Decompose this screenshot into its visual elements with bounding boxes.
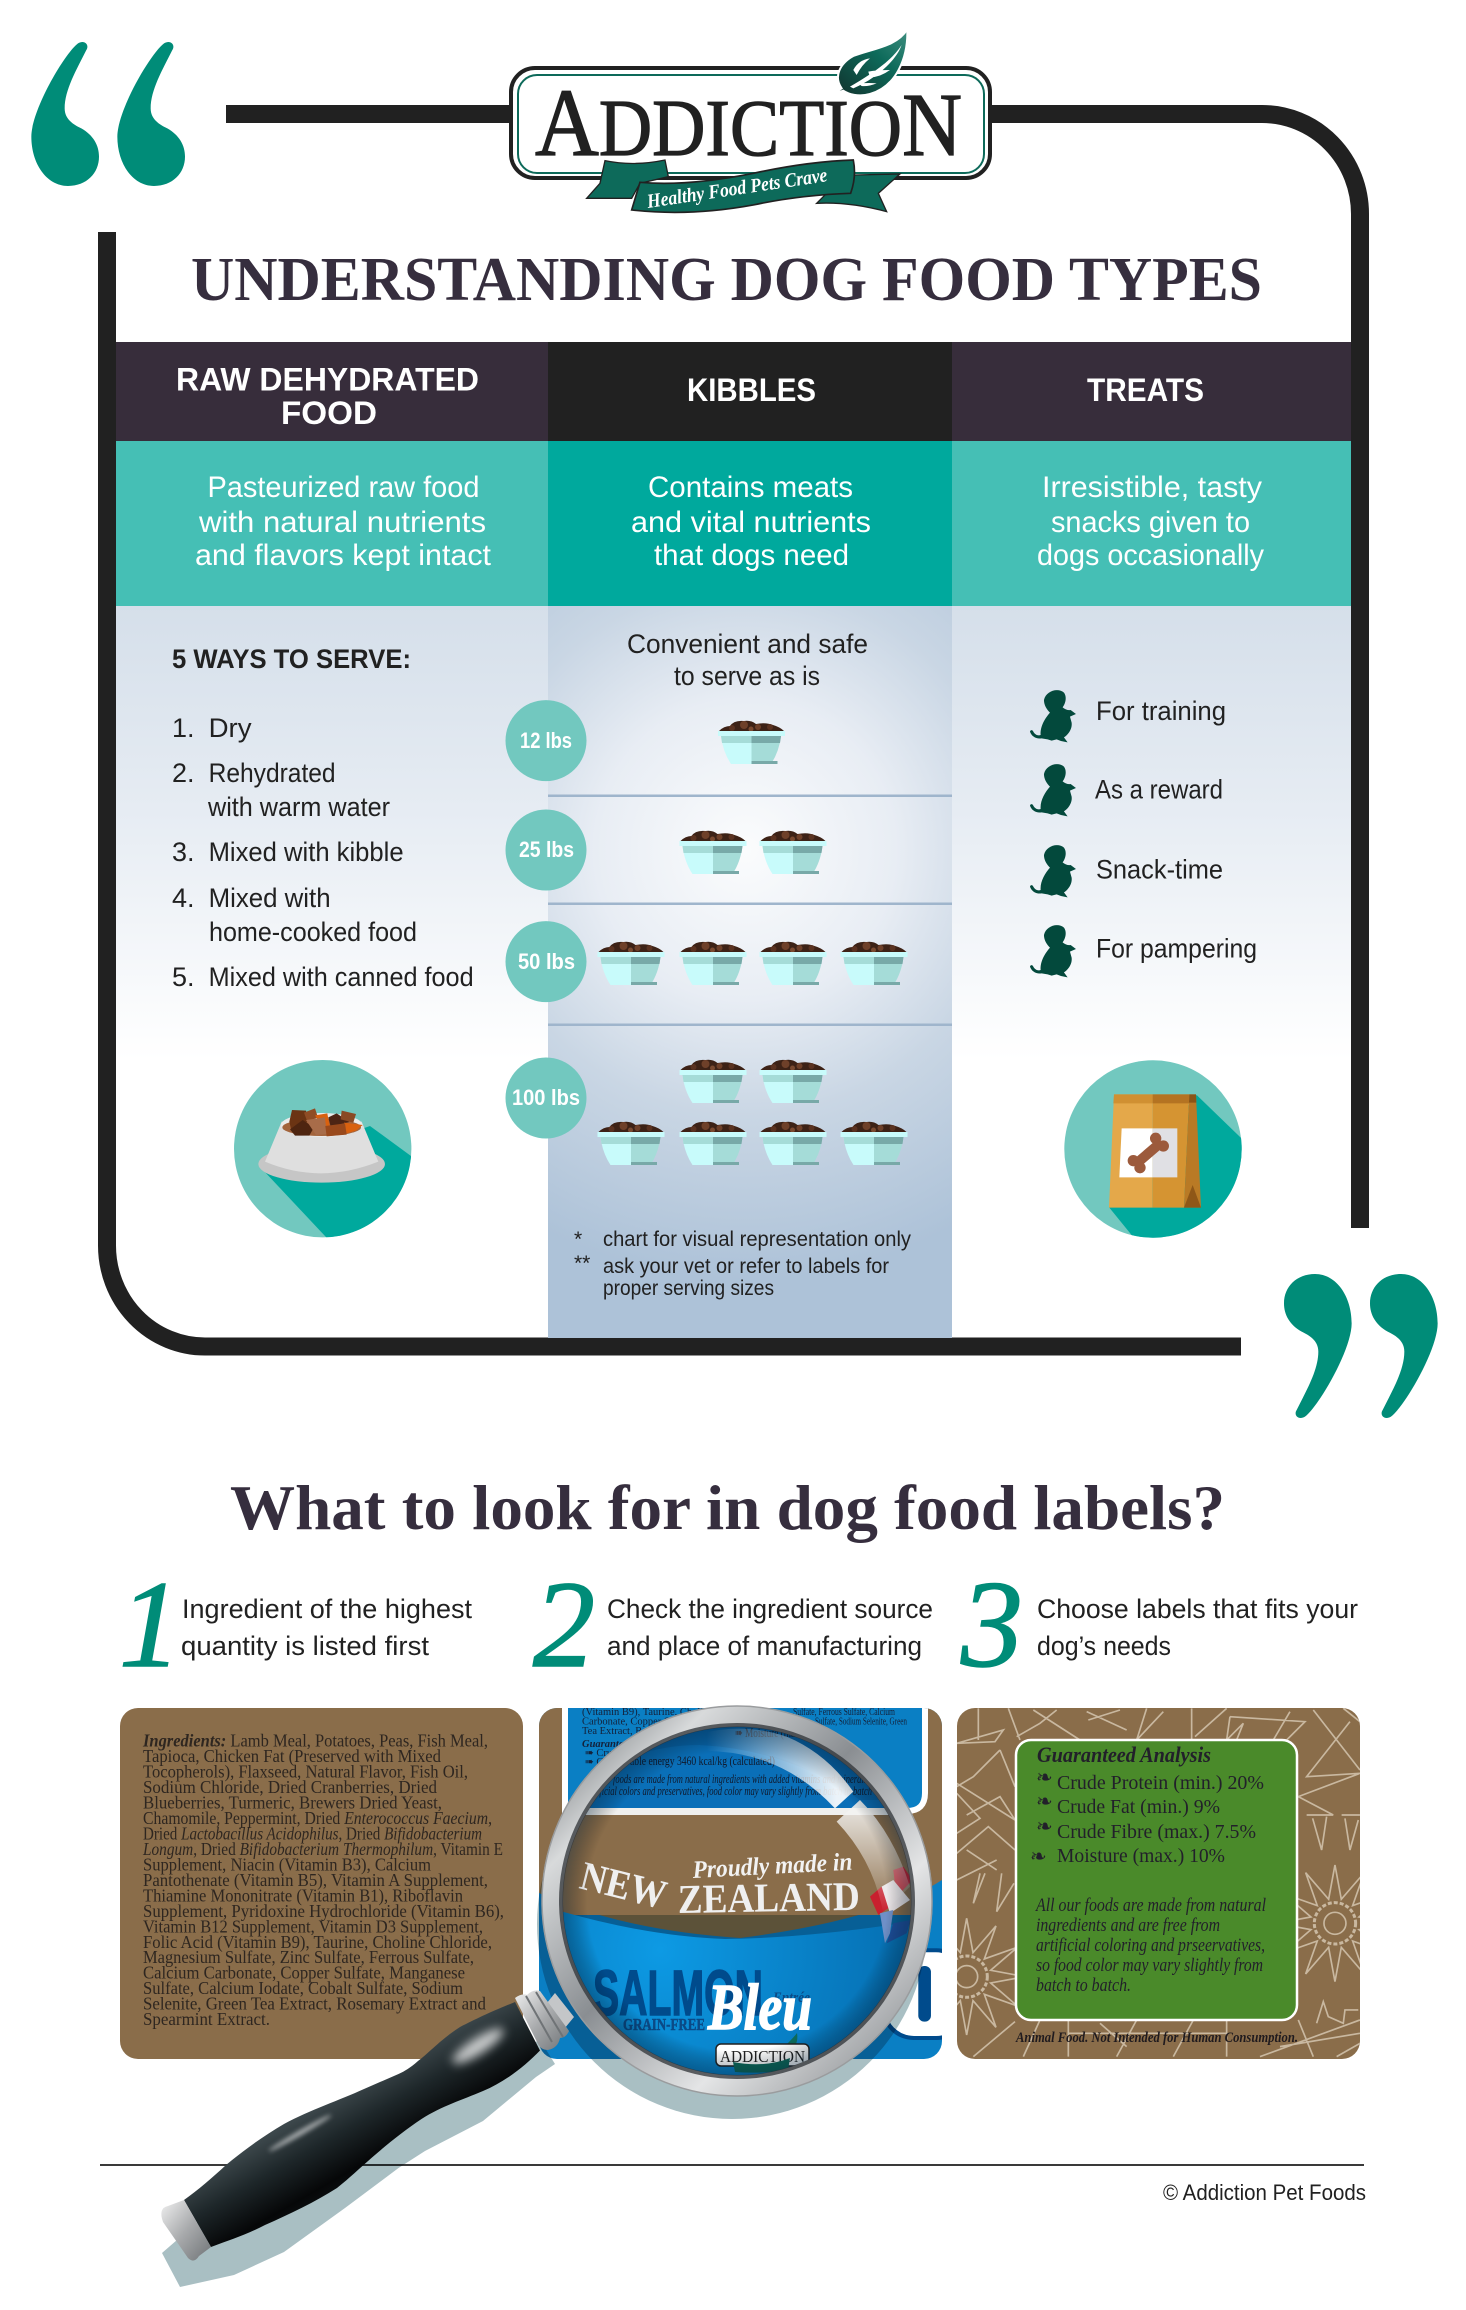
ingredients text: Dried Lactobacillus Acidophilus, Dried Bifidobacterium [143,1824,482,1844]
magnified label contents [562,1726,912,2076]
logo ribbon [587,160,900,212]
ingredients text: Ingredients: Lamb Meal, Potatoes, Peas, Fish Meal, [142,1731,488,1751]
raw heading [176,362,479,431]
tip 2 [533,1556,933,1693]
treats description [1037,471,1264,572]
serving list: 2. [172,758,195,788]
green analysis panel: Crude Fat (min.) 9% [1057,1796,1220,1818]
treat reason: for pampering [1030,925,1257,977]
serving list [172,713,474,992]
serving list: 5. [172,962,195,992]
tip 1: Ingredient of the highest [182,1594,472,1624]
column: kibbles [506,342,952,1338]
serving row: 100 lbs: 100 lbs [512,1085,580,1110]
tip 2: Check the ingredient source [607,1594,933,1624]
treats description: dogs occasionally [1037,539,1264,572]
label card: source and manufacturing: (Vitamin B9), Taurine, Choline [582,1707,713,1718]
treat reason: for training [1030,690,1226,742]
serving list: 3. [172,837,195,867]
tip 3: dog’s needs [1037,1631,1171,1661]
label card: source and manufacturing: Sulfate, Sodium Selenite, Green [815,1716,908,1728]
serving list: 4. [172,883,195,913]
label card: source and manufacturing: Guaranteed [582,1739,634,1750]
treat reason: snack-time [1030,845,1223,897]
serving row: 100 lbs [506,1058,908,1165]
copyright: © Addiction Pet Foods [1163,2180,1366,2205]
footnotes: ** [574,1252,590,1275]
ingredients text: Calcium Carbonate, Copper Sulfate, Manganese [143,1963,465,1983]
label card: source and manufacturing: ➠ Crude [585,1757,622,1768]
tip 3: Choose labels that fits your [1037,1594,1358,1624]
treat reason: snack-time: Snack-time [1096,854,1223,884]
icon: treat bag [1064,1060,1242,1238]
green analysis panel: All our foods are made from natural [1034,1895,1266,1916]
footnotes: chart for visual representation only [603,1228,911,1251]
treats description: snacks given to [1051,506,1250,539]
kibbles note: to serve as is [674,661,820,691]
kibbles description [631,471,871,572]
green analysis panel: Guaranteed Analysis [1037,1742,1211,1767]
serving row: 25 lbs: 25 lbs [519,837,574,862]
label card: ingredients [120,1708,523,2059]
raw description: Pasteurized raw food [208,471,480,504]
ingredients text: Supplement, Pyridoxine Hydrochloride (Vitamin B6), [143,1901,504,1921]
ingredients text: Chamomile, Peppermint, Dried Enterococcus Faecium, [143,1808,492,1828]
ingredients text: Selenite, Green Tea Extract, Rosemary Extract and [143,1994,486,2014]
label card: source and manufacturing [539,1700,968,2059]
magnified small print: ➠ Moisture (max.) [735,1725,805,1740]
green analysis panel: Crude Protein (min.) 20% [1057,1772,1264,1794]
serving row: 50 lbs: 50 lbs [518,949,575,974]
ingredients text: Thiamine Mononitrate (Vitamin B1), Riboflavin [143,1885,463,1905]
green analysis panel: ❧ [1036,1765,1053,1789]
footnotes: * [574,1228,582,1251]
serving row: 12 lbs: 12 lbs [520,728,572,753]
raw description: and flavors kept intact [195,539,492,572]
ingredients text: Magnesium Sulfate, Zinc Sulfate, Ferrous Sulfate, [143,1947,474,1967]
salmon product name: SALMON [593,1957,763,2029]
kibbles description: Contains meats [648,471,853,504]
logo leaf [834,29,907,95]
tip 2: and place of manufacturing [607,1631,922,1661]
raw description [195,471,492,572]
ingredients text: Sulfate, Calcium Iodate, Cobalt Sulfate, Sodium [143,1978,463,1998]
footnotes [574,1228,911,1300]
serving list: Mixed with [209,883,331,913]
ingredients text: Spearmint Extract. [143,2009,270,2029]
tip 1 [119,1556,472,1693]
logo: Addiction [511,29,990,213]
ingredients text: Longum, Dried Bifidobacterium Thermophilum, Vitamin E [142,1839,503,1859]
logo: Addiction: Healthy Food Pets Crave [645,164,829,213]
footnotes: ask your vet or refer to labels for [603,1255,889,1278]
label card: source and manufacturing: Carbonate, Copper Sulfate [582,1716,694,1728]
new zealand text: ZEALAND [677,1873,860,1922]
ingredients text: Supplement, Niacin (Vitamin B3), Calcium [143,1854,431,1874]
small logo on pack [716,2033,809,2073]
magnified small print: ificial colors and preservatives, food color may vary slightly from batch to batch [597,1784,872,1798]
magnifying glass [161,1700,940,2287]
treat reason: as a reward [1030,764,1223,816]
label card: source and manufacturing: ➠ Crude [585,1748,622,1759]
treats heading: TREATS [1087,372,1204,408]
serving list: Rehydrated [209,758,336,788]
serving list: with warm water [207,792,390,822]
serving row: 12 lbs [506,700,785,781]
ingredients text: Sodium Chloride, Dried Cranberries, Dried [143,1777,437,1797]
opening quotation mark [31,42,185,186]
label card: source and manufacturing: Tea Extract, Rosemary [582,1726,679,1737]
serving list: Dry [209,713,252,743]
serving heading: 5 WAYS TO SERVE: [172,644,411,674]
kibbles description: that dogs need [654,539,849,572]
divider line [100,2164,1364,2166]
flag fragment [870,1867,913,1943]
animal food disclaimer: Animal Food. Not Intended for Human Consumption. [1015,2030,1298,2046]
section heading: labels: What to look for in dog food labels? [230,1473,1225,1543]
ingredients text: Blueberries, Turmeric, Brewers Dried Yeast, [143,1793,442,1813]
raw heading: RAW DEHYDRATED [176,362,479,398]
green analysis panel [1016,1740,1297,2020]
tip 2: 2 [533,1556,595,1693]
title: UNDERSTANDING DOG FOOD TYPES [191,246,1262,314]
tip 3 [960,1556,1358,1693]
salmon product name [595,1969,811,2031]
salmon product name: Entrée [772,1990,810,2006]
closing quotation mark [1284,1274,1438,1418]
green analysis panel: ❧ [1036,1789,1053,1813]
magnified small print [597,1725,872,1798]
new zealand text: NEW [576,1852,671,1918]
kibbles heading: KIBBLES [687,372,816,408]
new zealand text [578,1862,858,1913]
column: raw dehydrated food [116,342,548,1253]
treats description: Irresistible, tasty [1042,471,1262,504]
treat reason: as a reward: As a reward [1095,774,1223,804]
treat reason: for training: For training [1096,696,1226,726]
column: treats [952,342,1351,1253]
ingredients text: Folic Acid (Vitamin B9), Taurine, Choline Chloride, [143,1932,492,1952]
serving row: 50 lbs [506,921,908,1002]
card pattern [957,1708,1360,2058]
salmon product name: Bleu [707,1971,812,2044]
footnotes: proper serving sizes [603,1277,774,1300]
green analysis panel: so food color may vary slightly from [1036,1955,1263,1976]
lens ring [542,1706,932,2096]
green analysis panel: batch to batch. [1036,1975,1131,1996]
green analysis panel: ❧ [1030,1844,1047,1868]
magnifier shadow [162,1729,927,2287]
green analysis panel: ❧ [1036,1814,1053,1838]
green analysis panel: ingredients and are free from [1036,1915,1220,1936]
serving row: 25 lbs [506,810,826,890]
label card: source and manufacturing: Sulfate, Ferrous Sulfate, Calcium [793,1707,895,1718]
tip 1: 1 [119,1556,181,1693]
kibbles note: Convenient and safe [627,629,868,659]
magnified small print: foods are made from natural ingredients with added vitamins and minerals [613,1772,867,1786]
green analysis panel: artificial coloring and prseervatives, [1036,1935,1265,1956]
tip 1: quantity is listed first [181,1631,430,1661]
magnified small print: able energy 3460 kcal/kg (calculated) [630,1753,775,1768]
treat reason: for pampering: For pampering [1096,934,1257,964]
raw description: with natural nutrients [198,506,486,539]
frame: dark rounded border [107,114,1360,1346]
lens glare [712,1728,910,1909]
kibbles note [627,629,868,691]
raw heading: FOOD [281,395,377,431]
small logo on pack: ADDICTION [720,2047,805,2066]
salmon product name: GRAIN-FREE [623,2015,705,2034]
serving list: home-cooked food [209,917,417,947]
green analysis panel: Moisture (max.) 10% [1057,1845,1225,1867]
proudly made in text: Proudly made in [691,1849,853,1884]
ingredients text: Tocopherols), Flaxseed, Natural Flavor, Fish Oil, [143,1762,468,1782]
icon: dog food bowl [234,1060,412,1238]
logo: Addiction: ADDICTION [535,69,962,176]
serving list: Mixed with canned food [209,962,474,992]
serving list: 1. [172,713,195,743]
serving list: Mixed with kibble [209,837,404,867]
ingredients text [142,1731,504,2029]
label card: guaranteed analysis [957,1708,1360,2059]
ingredients text: Tapioca, Chicken Fat (Preserved with Mixed [143,1746,441,1766]
kibbles description: and vital nutrients [631,506,871,539]
tip 3: 3 [960,1556,1023,1693]
green analysis panel: Crude Fibre (max.) 7.5% [1057,1821,1256,1843]
ingredients text: Vitamin B12 Supplement, Vitamin D3 Supplement, [143,1916,483,1936]
ingredients text: Pantothenate (Vitamin B5), Vitamin A Supplement, [143,1870,488,1890]
magnifier handle [161,1990,574,2261]
